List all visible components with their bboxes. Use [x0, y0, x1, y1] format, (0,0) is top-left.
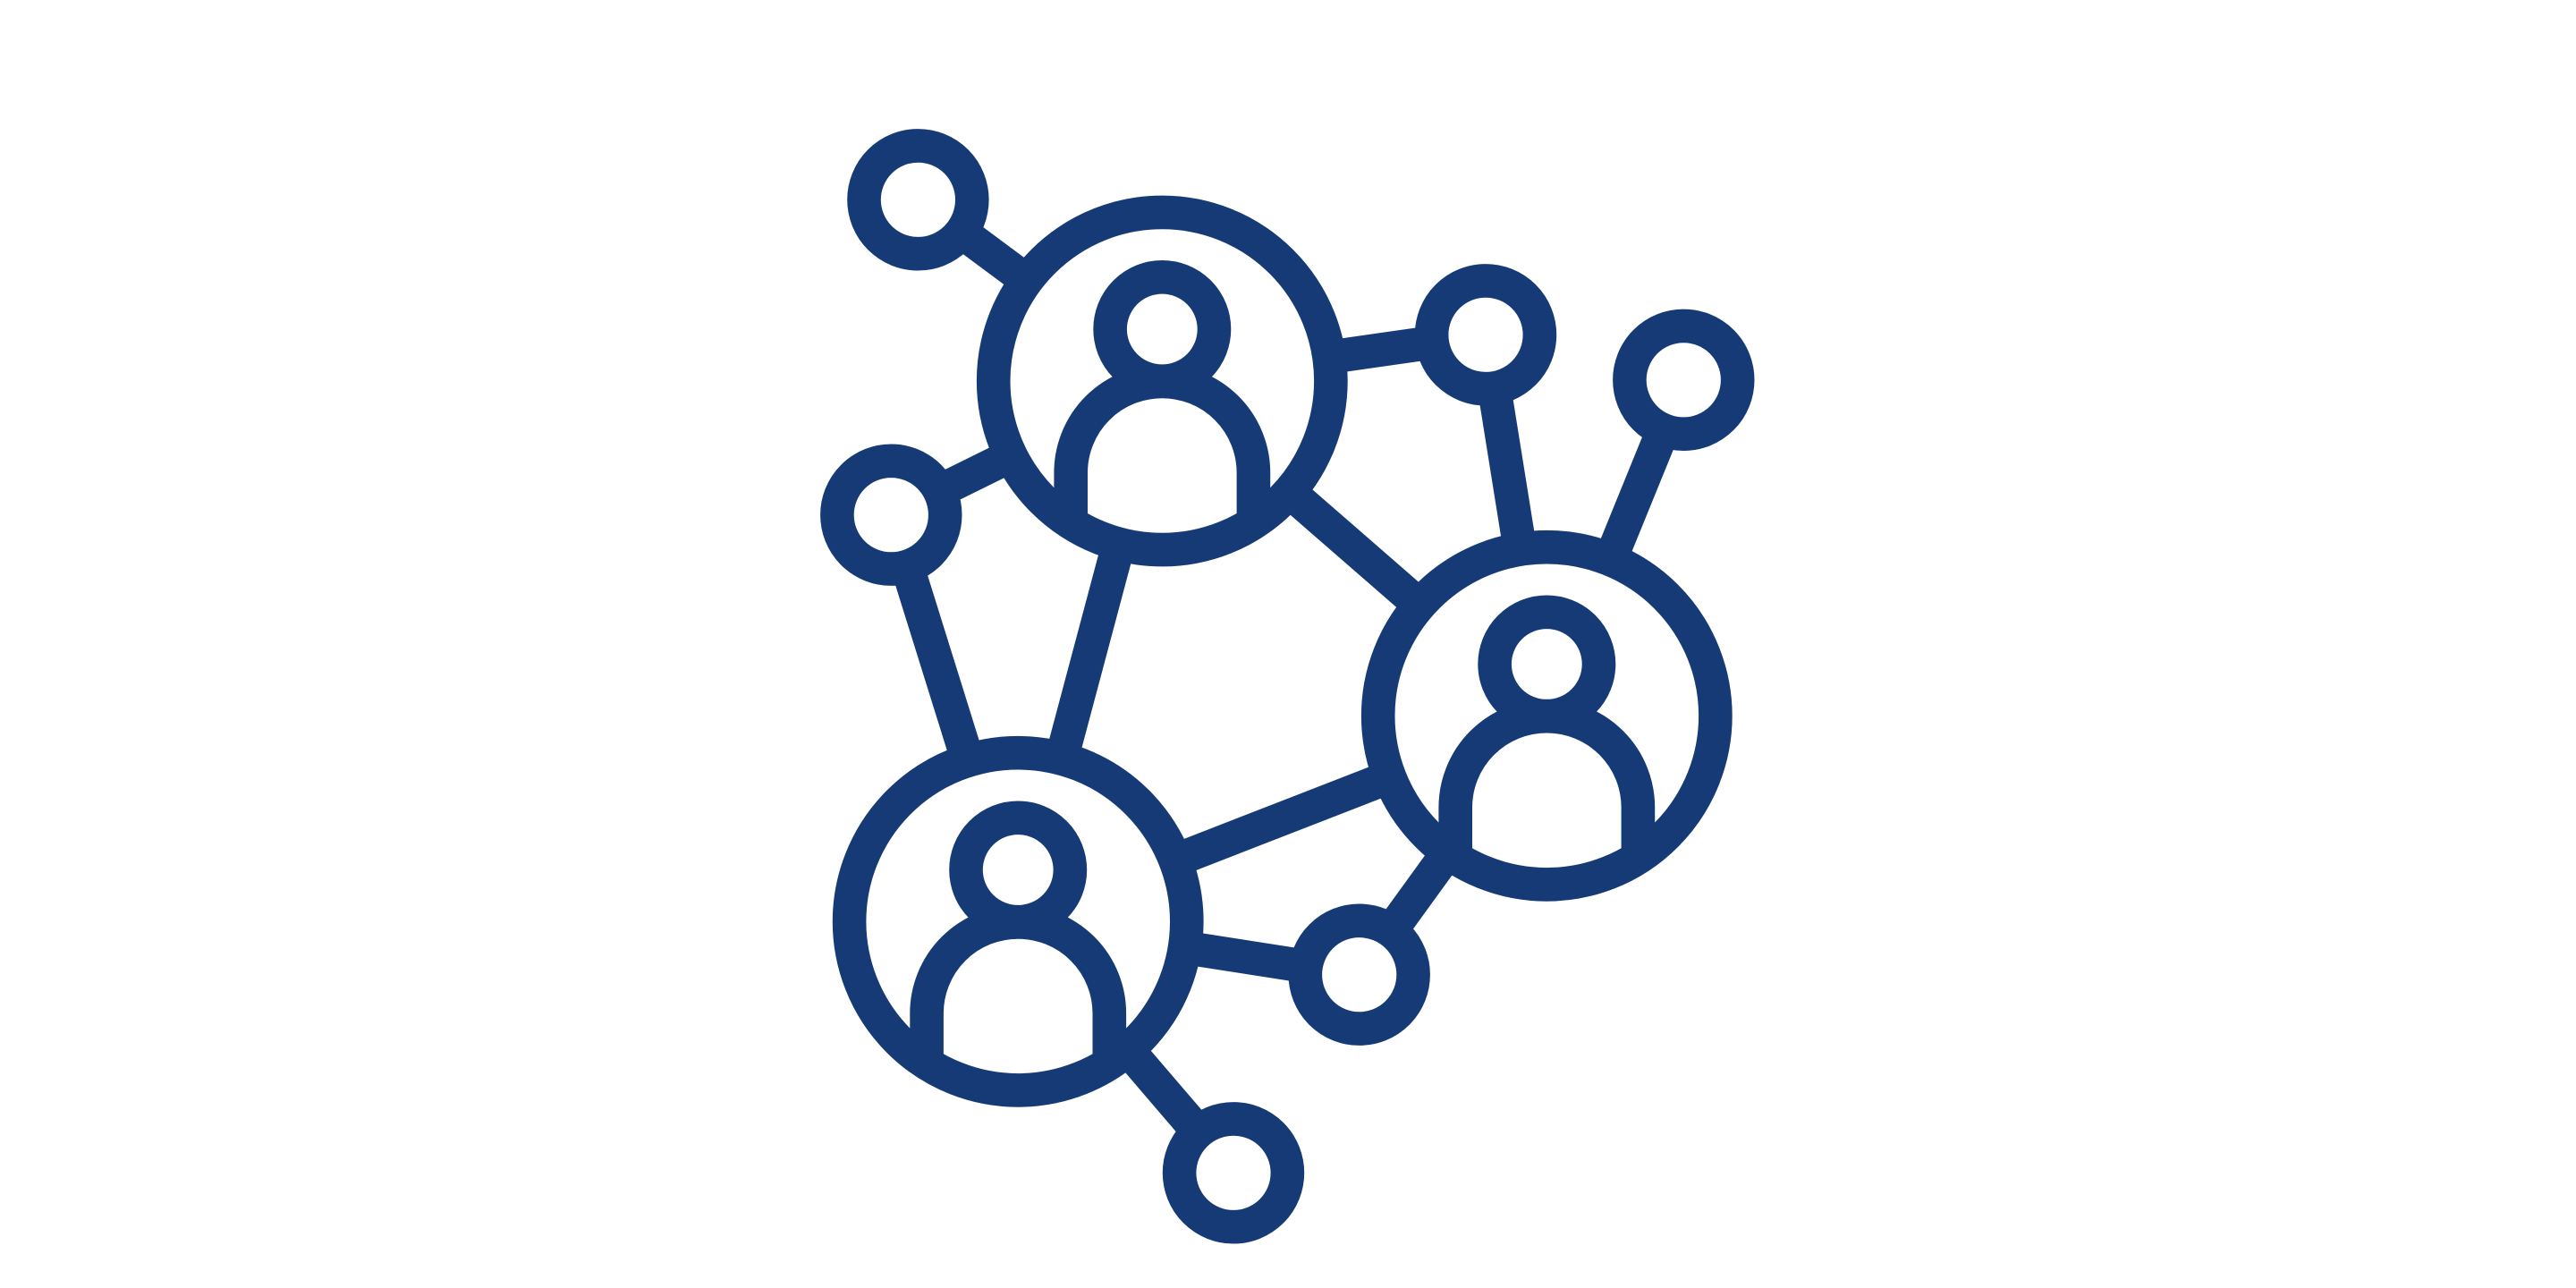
person node: top: [994, 212, 1331, 550]
person node: lower left: [850, 753, 1187, 1090]
small node: far right: [1630, 326, 1738, 434]
small node: bottom: [1180, 1119, 1287, 1227]
small node: middle left: [837, 461, 945, 569]
person node: right: [1378, 547, 1716, 885]
small node: top centre right: [1432, 281, 1539, 389]
connector lines: [891, 199, 1683, 1173]
small node: lower centre: [1305, 920, 1413, 1029]
small node: top left: [864, 146, 972, 254]
